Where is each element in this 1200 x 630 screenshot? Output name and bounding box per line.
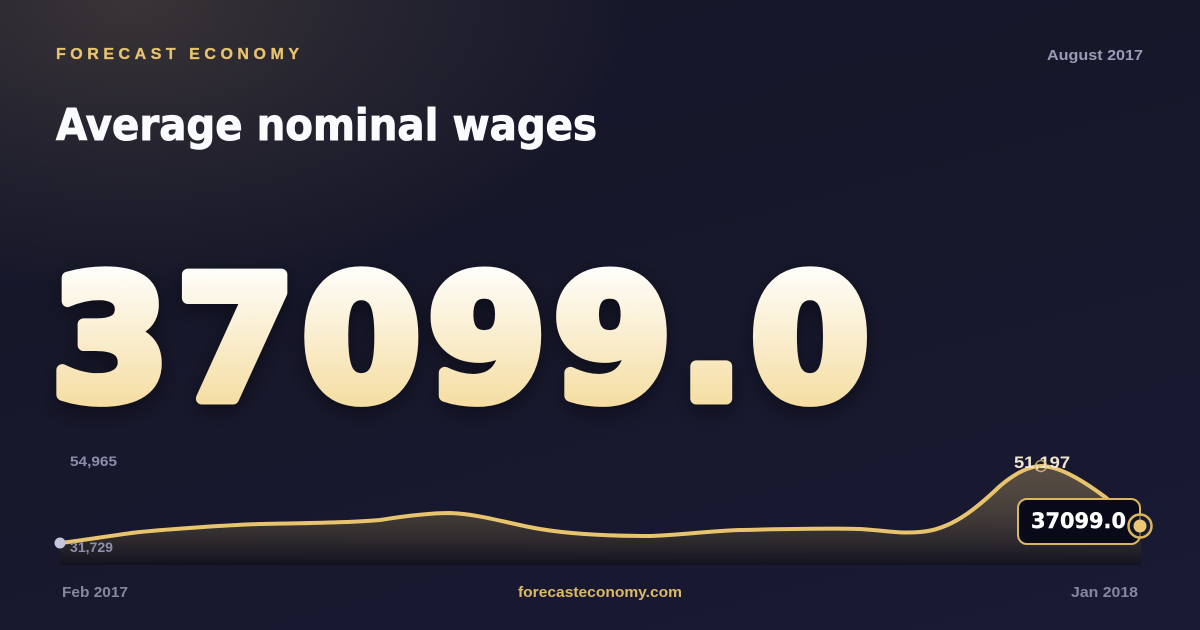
date label: August 2017 (1047, 47, 1143, 64)
peak marker (1036, 460, 1046, 472)
min label: 31,729 (70, 539, 113, 555)
sparkline chart (54, 453, 1141, 565)
current value callout (1018, 499, 1140, 544)
axis start date: Feb 2017 (62, 584, 128, 601)
big number: 37099.0 (51, 242, 876, 440)
line (60, 466, 1141, 543)
max label: 54,965 (70, 453, 117, 469)
source website: forecasteconomy.com (518, 584, 682, 601)
peak value: 51,197 (1014, 453, 1070, 472)
area under line (60, 466, 1141, 565)
title: Average nominal wages (56, 100, 597, 151)
current value callout: 37099.0 (1031, 509, 1126, 533)
axis end date: Jan 2018 (1071, 584, 1138, 601)
start point (54, 538, 66, 548)
brand label: FORECAST ECONOMY (56, 46, 299, 63)
current point marker (1128, 514, 1152, 538)
